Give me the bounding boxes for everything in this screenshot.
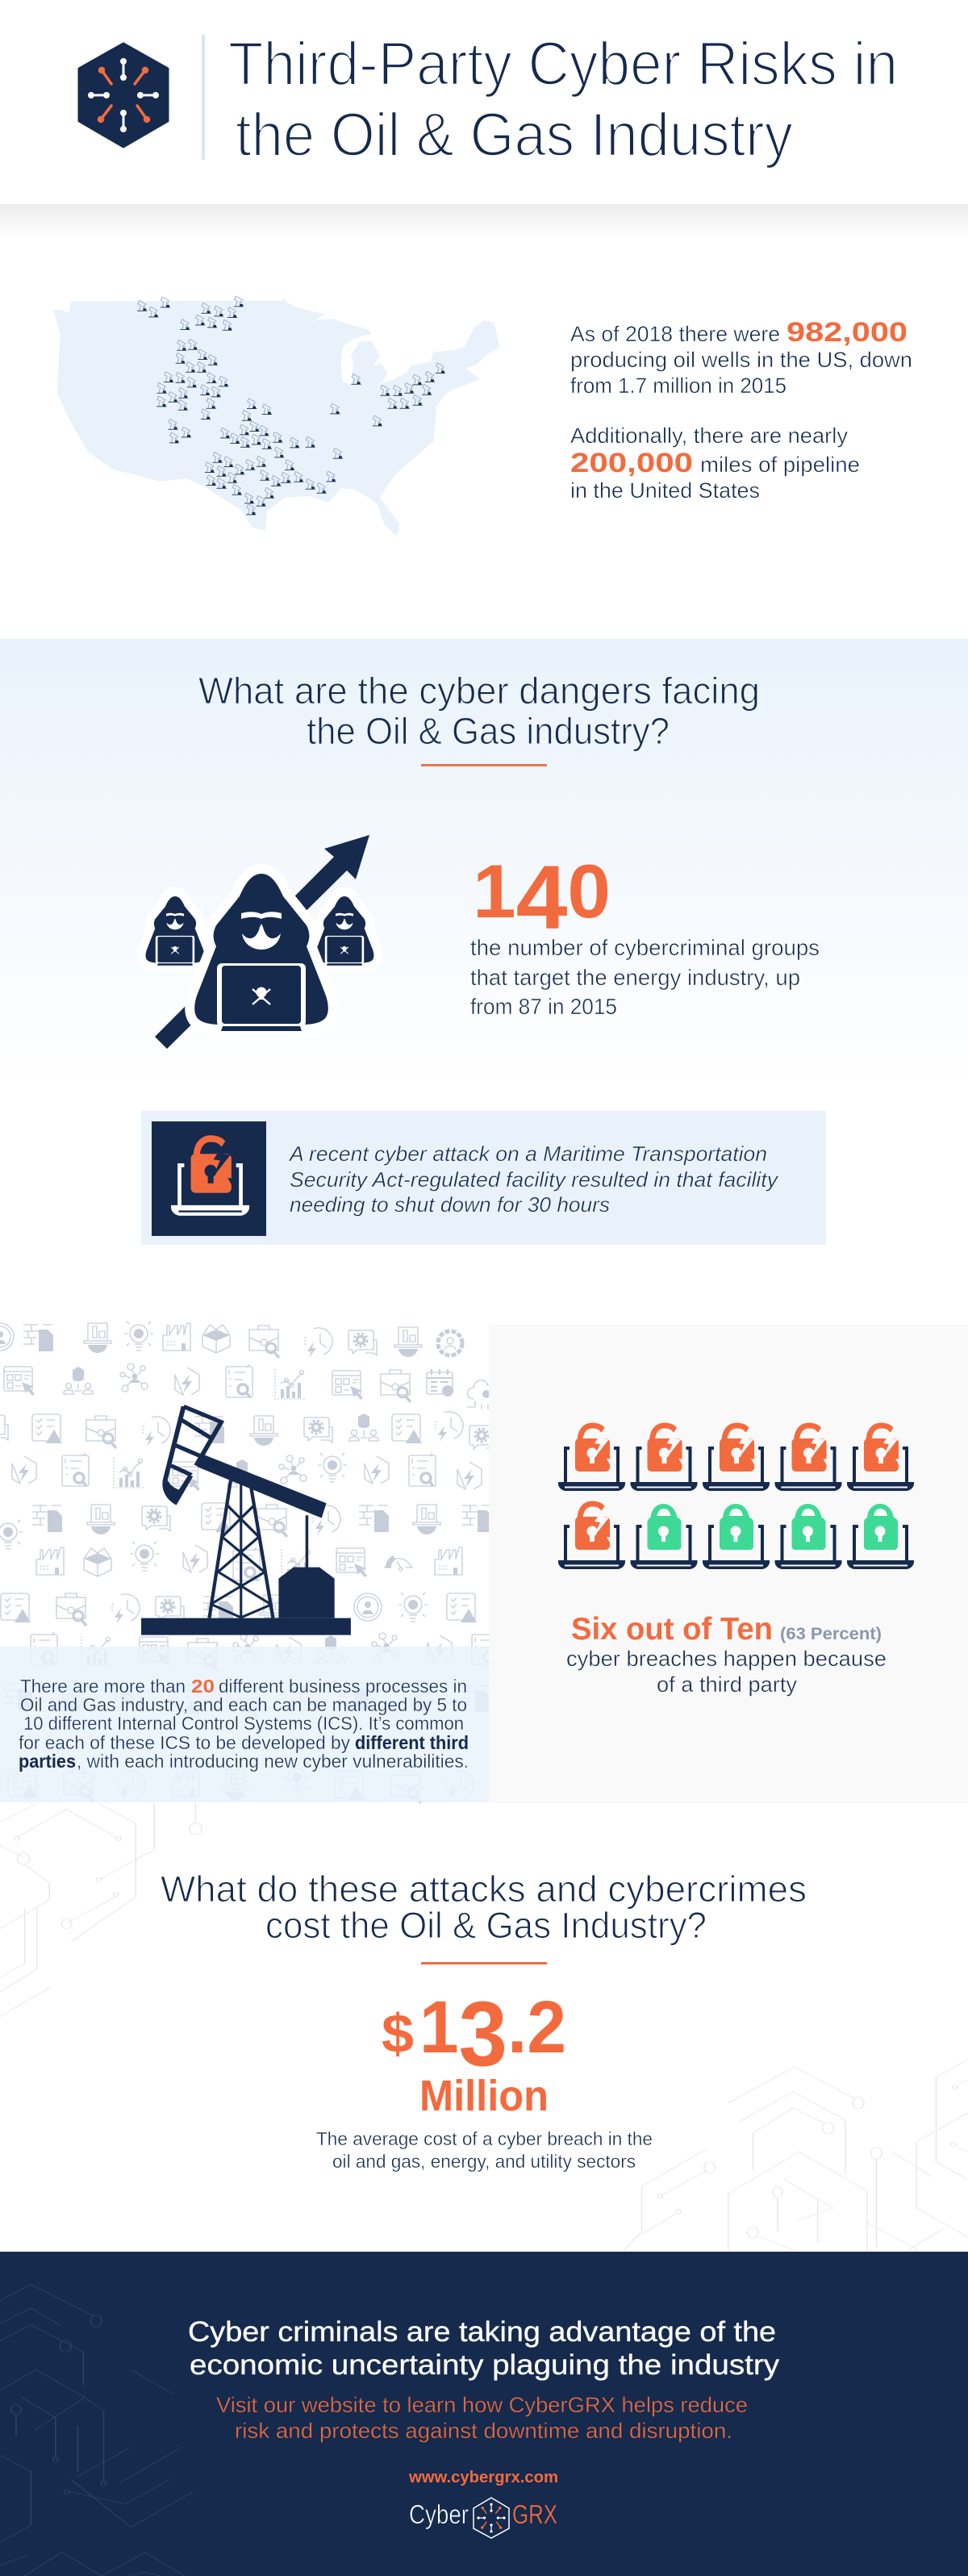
text: business processes copy: parties [19,1751,76,1772]
text: cost description: The average cost of a cyber breach in the [316,2128,653,2149]
header panel [0,0,968,204]
text: oil wells and pipeline stats: from 1.7 million in 2015 [570,374,786,398]
stat: 140 groups: 4 [516,847,567,948]
text: oil wells and pipeline stats: 200,000 [570,448,693,478]
stat: 140 groups: 1 [473,849,515,933]
text: callout copy: needing to shut down for 30 hours [290,1192,610,1217]
header shadow band [0,202,968,237]
text: cost description [316,2128,653,2172]
text: website invitation: Visit our website to learn how CyberGRX helps reduce [216,2393,748,2417]
circuit decoration: cost section top left [0,1803,202,2017]
text: stat description [470,935,820,1019]
US map with oil wells [53,296,500,536]
text: oil wells and pipeline stats: 982,000 [786,317,908,348]
text: business processes copy: , with each introducing new cyber vulnerabilities. [77,1751,469,1772]
stat: 140 groups: 0 [567,849,611,933]
heading: cost of attacks [161,1868,807,1946]
text: website invitation: risk and protects against downtime and disruption. [235,2419,732,2443]
circuit decoration: footer [0,2285,193,2576]
circuit decoration: cost section bottom right [624,2060,968,2251]
text: business processes copy: There are more than [20,1676,186,1697]
icon: large oil pumpjack [141,1406,351,1635]
text: oil wells and pipeline stats [570,317,912,503]
arrow [155,835,369,1049]
text: oil wells and pipeline stats: miles of pipeline [700,453,860,477]
icon: CyberGRX hexagon logo [79,44,168,147]
text: business processes copy: for each of these ICS to be developed by [19,1732,350,1753]
text: business processes copy: different business processes in [219,1676,467,1697]
panel: six out of ten [489,1325,968,1803]
text: stat description: that target the energy industry, up [470,965,800,990]
text: oil wells and pipeline stats: As of 2018 there were [570,322,780,346]
text: six out of ten copy: cyber breaches happen because [566,1647,887,1671]
heading: cost of attacks: cost the Oil & Gas Industry? [265,1905,707,1946]
stat: 13.2 million [316,1983,653,2172]
text: oil wells and pipeline stats: Additionally, there are nearly [570,424,848,448]
title [228,30,898,169]
text: callout copy [288,1142,779,1217]
stat: 13.2 million: Million [419,2072,549,2120]
text: cost description: oil and gas, energy, and utility sectors [332,2151,636,2172]
background icon pattern [0,1321,499,1803]
text: six out of ten copy [566,1612,887,1697]
text: business processes copy: Oil and Gas industry, and each can be managed by 5 to [20,1694,467,1715]
text: oil wells and pipeline stats: producing oil wells in the US, down [570,348,912,372]
icon: broken lock on laptop [171,1138,249,1216]
stat: 140 groups [470,847,820,1019]
footer logo [409,2498,557,2538]
text: six out of ten copy: of a third party [657,1672,797,1697]
text: website invitation [216,2393,748,2443]
text: callout copy: Security Act-regulated facility resulted in that facility [290,1167,779,1192]
text: six out of ten copy: Six out of Ten [571,1612,773,1647]
footer logo: GRX [512,2499,557,2529]
large hacker [194,874,328,1031]
heading: call to action: economic uncertainty plaguing the industry [190,2349,780,2381]
text: oil wells and pipeline stats: in the United States [570,478,760,503]
heading: cyber dangers: What are the cyber dangers facing [198,670,760,712]
icons: laptops with locks [558,1426,914,1569]
small hacker left [146,896,204,966]
small hacker right [315,896,373,966]
stat: 13.2 million: 3 [459,1983,507,2085]
text: six out of ten copy: (63 Percent) [780,1625,882,1643]
text: business processes copy [19,1676,469,1772]
text: business processes copy: different third [355,1732,469,1753]
callout: maritime attack [141,1111,826,1245]
text: stat description: from 87 in 2015 [470,994,617,1019]
heading: cost of attacks: What do these attacks and cybercrimes [161,1868,807,1910]
footer panel [0,2252,968,2576]
stat: 13.2 million: $ [382,2003,414,2065]
heading: cyber dangers: the Oil & Gas industry? [307,710,670,752]
panel: business processes text [0,1647,489,1802]
text: business processes copy: 10 different Internal Control Systems (ICS). It’s common [23,1713,464,1734]
section background: cyber dangers [0,639,968,1091]
text: callout copy: A recent cyber attack on a Maritime Transportation [288,1142,767,1166]
icon: rising arrow with hackers [146,835,373,1049]
title: the Oil & Gas Industry [236,101,793,169]
heading: call to action [188,2316,780,2381]
stat: 13.2 million: .2 [507,1986,566,2069]
heading: cyber dangers [198,670,760,752]
text: business processes copy: 20 [191,1676,215,1697]
title: Third-Party Cyber Risks in [228,30,898,98]
stat: 13.2 million: 1 [419,1986,461,2069]
heading: call to action: Cyber criminals are taking advantage of the [188,2316,776,2348]
text: stat description: the number of cybercriminal groups [470,935,820,960]
footer logo: Cyber [409,2499,469,2529]
icons: oil pumpjacks on map [137,296,445,515]
text: website url: www.cybergrx.com [408,2469,558,2486]
